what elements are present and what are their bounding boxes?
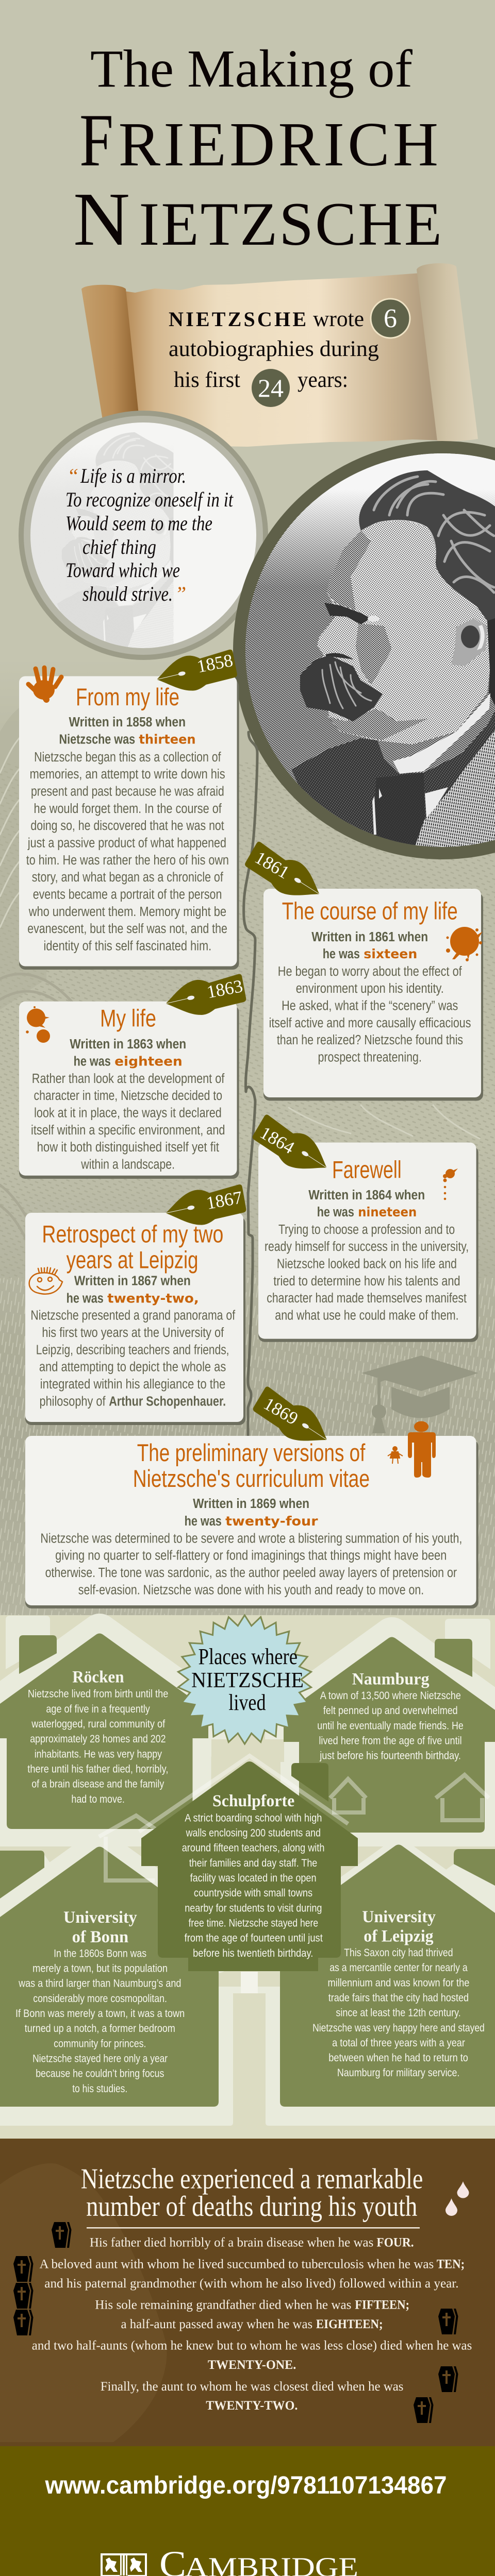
house text: Naumburg [317,1670,464,1762]
panel text: From my life: he would forget them. In the course of [34,802,222,816]
panel: Retrospect of my two years at Leipzig [25,1213,245,1425]
title: The Making of [90,39,412,98]
house text: Röcken: approximately 28 homes and 202 [30,1733,166,1745]
house text: Naumburg: lived here from the age of five until [319,1734,462,1747]
panel: Farewell: Farewell [332,1156,402,1183]
panel text: The course of my life: than he realized? Nietzsche found this [277,1033,463,1047]
house text: Schulpforte: facility was located in the open [190,1872,317,1884]
scroll banner [81,263,478,447]
panel: The preliminary versions of Nietzsche's curriculum vitae [25,1421,478,1608]
badge: 6: 6 [384,304,397,333]
pen nib: 1863 [162,972,248,1021]
panel text: Retrospect: integrated within his allegiance to the [40,1377,225,1392]
icon: tall man and small child [388,1421,436,1478]
house text: University of Leipzig: as a mercantile center for nearly a [329,1961,468,1974]
panel text: My life: look at it in place, the ways it declared [34,1106,222,1120]
panel text: From my life: just a passive product of what happened [27,836,226,850]
panel text: From my life [26,750,229,953]
panel: The course of my life [263,889,483,1100]
house text: University of Leipzig: of Leipzig [364,1927,434,1946]
panel: Farewell: nineteen [358,1205,417,1219]
list of deaths: His father died horribly of a brain disease when he was [90,2236,373,2250]
walkway [0,1739,495,2139]
icons: coffins [13,2222,458,2423]
pen nib: 1863: 1863 [205,976,244,1002]
house text: Schulpforte: before his twentieth birthday. [193,1947,313,1959]
lower house outlines [0,1844,495,2126]
house text: University of Leipzig: This Saxon city had thrived [344,1946,453,1959]
starburst: Places where Nietzsche lived: lived [228,1690,266,1715]
panel text: The course of my life: prospect threatening. [318,1050,422,1064]
scroll: left roller [81,285,139,420]
list of deaths: and two half-aunts (whom he knew but to whom he was less close) died when he was [32,2339,472,2353]
quote: text: Would seem to me the [65,512,212,535]
panel: Retrospect of my two years at Leipzig: he was [67,1291,104,1306]
starburst: Places where Nietzsche lived [170,1608,319,1751]
title: RIEDRICH [119,110,438,179]
house text: Schulpforte: around fifteen teachers, along with [182,1842,324,1854]
house text: Schulpforte: their families and day staff. The [189,1857,317,1869]
panel text: From my life: evanescent, but the self was not, and the [27,922,227,936]
quote: faded portrait [30,432,173,648]
pen nib: 1864 [249,1112,336,1183]
house text: Naumburg: felt penned up and overwhelmed [323,1704,458,1717]
panel text: From my life: memories, an attempt to write down his [30,767,225,782]
panel: Farewell: Written in 1864 when [308,1188,425,1202]
upper house outlines [0,1632,495,1833]
house text: University of Leipzig: between when he had to return to [328,2052,468,2064]
footer url: www.cambridge.org/9781107134867 [45,2472,447,2499]
panel text: My life: within a landscape. [80,1157,175,1172]
panel: The preliminary versions of Nietzsche's curriculum vitae: he was [185,1514,222,1529]
logo: Cambridge University Press shield [101,2553,147,2576]
logo: wordmark [159,2544,358,2576]
panel text: curriculum vitae [40,1531,462,1597]
house: University of Leipzig [263,1844,495,2107]
panel text: From my life: story, and what began as a chronicle of [32,870,224,885]
list of deaths: FOUR. [376,2236,414,2250]
house text: University of Bonn: turned up a notch, a former bedroom [25,2022,175,2035]
panel text: The course of my life: He began to worry about the effect of [278,964,462,979]
portrait medallion [233,441,495,859]
house text: University of Bonn: University [63,1908,137,1927]
house text: Schulpforte: nearby for students to visit during [185,1902,322,1914]
list of deaths: a half-aunt passed away when he was [121,2317,312,2331]
panel: My life: eighteen [114,1054,183,1069]
icon: smiling face doodle [29,1267,62,1294]
house: Röcken [0,1633,208,1829]
quote: text: “ [67,464,78,487]
panel text: Farewell: and what use he could make of them. [275,1309,459,1323]
portrait: engraving of Nietzsche [242,448,495,855]
chimney: University of Bonn [0,1851,44,1899]
footer [0,2446,495,2576]
house text: Röcken: Röcken [72,1668,124,1687]
panel text: Retrospect: Arthur Schopenhauer. [109,1394,226,1409]
panel: My life: Written in 1863 when [70,1037,186,1052]
house text: Röcken [27,1668,168,1805]
house text: University of Leipzig [312,1908,485,2079]
section: deaths during his youth [0,2139,495,2446]
house text: University of Bonn [15,1908,185,2095]
house text: Naumburg: just before his fourteenth birthday. [319,1750,461,1762]
list of deaths: TWENTY-ONE. [208,2358,296,2372]
background: faded engraving texture [0,659,495,1615]
house text: Naumburg: A town of 13,500 where Nietzsche [320,1689,461,1702]
house text: University of Bonn: In the 1860s Bonn was [54,1947,146,1959]
icon: ink splat [446,927,483,961]
panel text: The course of my life: environment upon his identity. [296,981,444,996]
icon: ink blots [26,1006,50,1043]
timeline connector [244,732,257,1438]
list of deaths: A beloved aunt with whom he lived succumbed to tuberculosis when he was [39,2258,434,2272]
section: places where Nietzsche lived [0,1608,495,2139]
pen nib: 1867 [162,1182,248,1231]
panel text: My life: how it both distinguished itself yet fit [37,1140,219,1155]
panel text: Retrospect: Nietzsche presented a grand panorama of [30,1309,236,1323]
strip between upper and lower houses [0,1846,495,1877]
panel: The course of my life: Written in 1861 when [311,930,428,944]
panel text: From my life: to him. He was rather the hero of his own [26,853,229,868]
panel: The preliminary versions of Nietzsche's curriculum vitae: The preliminary versions of [137,1439,366,1466]
house text: University of Leipzig: University [362,1908,436,1926]
panel: From my life: thirteen [139,732,196,747]
house text: University of Bonn: community for princes. [54,2037,146,2049]
panel: Retrospect of my two years at Leipzig: twenty-two, [107,1291,199,1306]
house text: University of Leipzig: Naumburg for military service. [337,2066,459,2079]
list of deaths: FIFTEEN; [355,2298,409,2312]
badge: 24 [252,369,290,407]
house text: University of Bonn: merely a town, but its population [32,1962,168,1975]
starburst: Places where Nietzsche lived: Places where [198,1644,298,1669]
house text: University of Bonn: to his studies. [72,2082,127,2095]
house: University of Bonn [0,1846,242,2107]
panel: Farewell: he was [317,1205,354,1219]
house text: Naumburg: until he eventually made friends. He [317,1719,464,1732]
quote circle [19,411,268,660]
badge: 24: 24 [258,374,284,402]
panel text: The course of my life: He asked, what if the “scenery” was [282,998,458,1013]
scroll: text [169,307,379,392]
house text: Röcken: waterlogged, rural community of [31,1718,165,1730]
pen nib: 1861 [241,839,328,910]
list of deaths: and his paternal grandmother (with whom he also lived) followed within a year. [44,2277,459,2291]
chimney: Schulpforte [291,1763,328,1802]
panel: Farewell [258,1143,478,1342]
house text: University of Bonn: If Bonn was merely a town, it was a town [15,2007,185,2020]
panel text: Retrospect: philosophy of [39,1394,106,1409]
pen nib: 1858: 1858 [195,650,235,677]
pen nib: 1861: 1861 [252,848,293,883]
panel text: Retrospect: his first two years at the University of [42,1326,224,1340]
house: Schulpforte [141,1761,358,1971]
title: N [73,177,130,262]
chimney: University of Leipzig [454,1849,495,1886]
panel text: Retrospect [30,1309,236,1409]
house text: Röcken: of a brain disease and the family [31,1778,164,1790]
starburst: Places where Nietzsche lived: NIETZSCHE [191,1669,304,1692]
house text: University of Leipzig: since at least the 12th century. [336,2007,461,2019]
scroll: text: years: [298,368,348,392]
panel text: Farewell: Trying to choose a profession and to [278,1223,455,1237]
house text: University of Leipzig: a total of three years with a year [332,2037,465,2049]
heading [81,2163,423,2223]
panel text: From my life: present and past because he was afraid [31,784,224,799]
panel: From my life: From my life [76,683,179,710]
pen nib: 1869: 1869 [260,1394,302,1429]
quote: text: Toward which we [65,558,180,582]
ghost house icons [99,1756,489,1880]
page background [0,0,495,1615]
panel text: Farewell: Nietzsche looked back on his life and [277,1257,457,1272]
quote: text: should strive. [82,582,173,605]
house text: Schulpforte: from the age of fourteen until just [185,1932,323,1944]
panel: From my life [19,668,239,970]
icon: orange handprint [28,668,61,700]
house text: University of Bonn: Nietzsche stayed here only a year [32,2053,168,2065]
panel: The course of my life: sixteen [364,946,417,961]
panel text: From my life: Nietzsche began this as a collection of [34,750,221,765]
quote: text: ” [175,582,186,605]
house text: Schulpforte: free time. Nietzsche stayed here [189,1917,318,1929]
house text: University of Bonn: of Bonn [72,1928,128,1946]
scroll: text: wrote [313,307,364,331]
scroll: right roller [417,263,478,441]
faded head silhouette [0,2163,167,2442]
panel text: The course of my life [269,964,471,1064]
chimney: Röcken [19,1635,57,1674]
quote: text [65,464,234,605]
panel: My life: My life [100,1005,156,1032]
title [73,39,442,262]
house text: Schulpforte: countryside with small towns [194,1887,312,1899]
panel text: From my life: who underwent them. Memory might be [28,905,226,919]
pen nib: 1867: 1867 [205,1187,244,1213]
house text: University of Bonn: was a third larger than Naumburg’s and [18,1977,181,1990]
panel text: My life [31,1072,225,1172]
house text: Naumburg: Naumburg [352,1670,430,1689]
badge: 6 [371,299,410,338]
panel: The preliminary versions of Nietzsche's curriculum vitae: Written in 1869 when [193,1497,309,1511]
quote: text: chief thing [82,535,156,558]
house: Naumburg [284,1637,495,1833]
house text: University of Bonn: considerably more cosmopolitan. [33,1992,167,2005]
pen nib: 1858 [153,647,239,697]
house text: Schulpforte: Schulpforte [212,1792,294,1810]
pen nib: 1869 [249,1384,336,1455]
panel text: My life: itself within a specific environment, and [31,1123,225,1138]
chimney: Naumburg [435,1639,472,1677]
panel text: My life: Rather than look at the development of [32,1072,225,1086]
panel text: Farewell: tried to determine how his talents and [273,1274,460,1289]
heading: Nietzsche experienced a remarkable [81,2163,423,2195]
panel: Retrospect of my two years at Leipzig: Retrospect of my two [42,1220,223,1248]
scroll: text: NIETZSCHE [169,308,306,331]
panel: The preliminary versions of Nietzsche's curriculum vitae: twenty-four [225,1514,318,1529]
panel text: From my life: doing so, he discovered that he was not [30,819,224,833]
panel: The course of my life: he was [323,947,360,961]
pen nib: 1864: 1864 [257,1123,298,1158]
heading: number of deaths during his youth [86,2191,417,2223]
scroll: text: his first [174,368,240,392]
house text: Röcken: there until his father died, horribly, [27,1763,168,1775]
panel text: curriculum vitae: self-evasion. Nietzsche was done with his youth and ready to move on. [78,1583,424,1597]
list of deaths [32,2236,472,2413]
panel text: Farewell [265,1223,469,1323]
house text: University of Bonn: because he couldn’t bring focus [36,2067,164,2080]
panel: Retrospect of my two years at Leipzig: Written in 1867 when [74,1274,191,1289]
panel text: Retrospect: Leipzig, describing teachers and friends, [36,1343,229,1357]
icon: ink drips [443,1168,458,1200]
door [241,1972,258,1993]
house text: Schulpforte: A strict boarding school with high [185,1811,322,1824]
list of deaths: EIGHTEEN; [316,2317,383,2331]
title: F [79,98,113,182]
quote: text: Life is a mirror. [80,464,186,487]
panel text: From my life: events became a portrait of the person [33,887,222,902]
house text: Röcken: Nietzsche lived from birth until the [28,1688,168,1700]
house text: Röcken: age of five in a frequently [46,1703,150,1715]
panel: Retrospect of my two years at Leipzig: years at Leipzig [67,1246,198,1274]
house text: University of Leipzig: millennium and was known for the [328,1976,469,1989]
panel text: Retrospect: and attempting to depict the whole as [39,1360,226,1375]
scroll: text: autobiographies during [169,337,379,361]
panel: My life [19,1002,239,1179]
icon: ghosted graduation cap and tassel [361,1355,478,1433]
icons: tear drops [446,2181,469,2216]
list of deaths: TEN; [437,2258,465,2272]
house text: Schulpforte [182,1792,324,1959]
list of deaths: His sole remaining grandfather died when he was [95,2298,351,2312]
list of deaths: TWENTY-TWO. [206,2399,298,2413]
house text: Röcken: inhabitants. He was very happy [35,1748,162,1760]
quote: text: To recognize oneself in it [65,488,234,511]
list of deaths: Finally, the aunt to whom he was closest died when he was [101,2380,403,2394]
panel: The preliminary versions of Nietzsche's curriculum vitae: Nietzsche's curriculum vitae [133,1465,370,1492]
scroll: parchment sheet [124,273,443,447]
house text: Schulpforte: walls enclosing 200 students and [186,1827,321,1839]
panel: From my life: Nietzsche was [59,733,135,747]
title: IETZSCHE [139,190,442,258]
panel: From my life: Written in 1858 when [69,715,186,730]
panel text: My life: character in time, Nietzsche decided to [34,1089,222,1103]
house text: Röcken: had to move. [71,1793,125,1805]
house text: University of Leipzig: trade fairs that the city had hosted [328,1992,469,2004]
panel text: From my life: identity of this self fascinated him. [43,939,211,953]
panel: My life: he was [74,1055,111,1069]
